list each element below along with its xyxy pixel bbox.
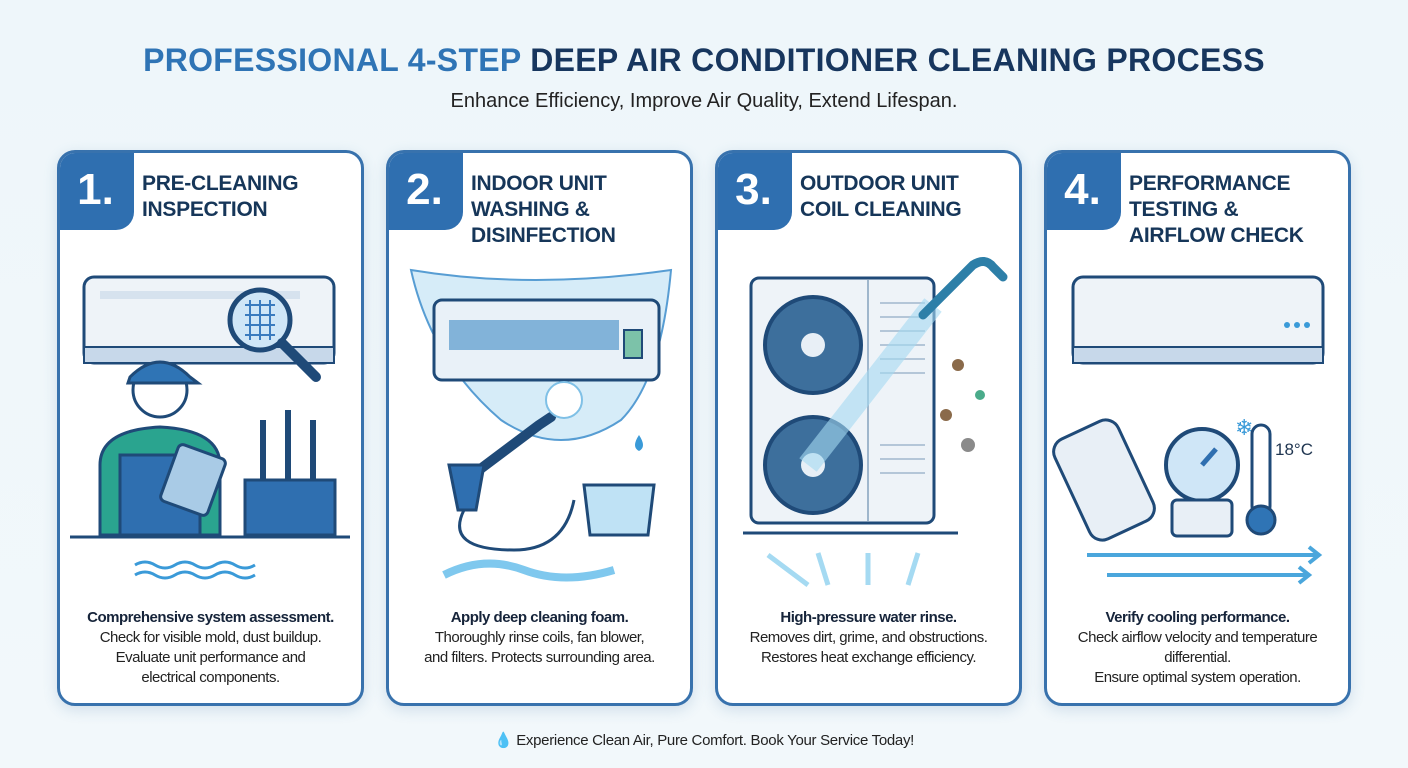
heading 3: COIL CLEANING xyxy=(800,198,961,221)
description 1: Comprehensive system assessment. xyxy=(87,609,334,626)
illustration: inspection xyxy=(70,276,350,580)
description 3: High-pressure water rinse. xyxy=(780,609,957,626)
badge 4 xyxy=(1044,150,1121,230)
badge 2 xyxy=(386,150,463,230)
description 1: electrical components. xyxy=(141,669,280,686)
description 2: and filters. Protects surrounding area. xyxy=(424,649,655,666)
illustration: testing: 18°C xyxy=(1275,440,1313,459)
heading 1 xyxy=(142,172,298,221)
badge 1 xyxy=(57,150,134,230)
description 4: Verify cooling performance. xyxy=(1105,609,1290,626)
illustration: indoor wash xyxy=(410,268,672,582)
description 2: Thoroughly rinse coils, fan blower, xyxy=(435,629,644,646)
heading 2: WASHING & xyxy=(471,198,590,221)
description 2: Apply deep cleaning foam. xyxy=(451,609,628,626)
description 3: Restores heat exchange efficiency. xyxy=(761,649,976,666)
heading 4 xyxy=(1129,172,1304,247)
description 1: Check for visible mold, dust buildup. xyxy=(100,629,321,646)
badge 2: 2. xyxy=(406,165,443,214)
heading 1: INSPECTION xyxy=(142,198,267,221)
description 1 xyxy=(87,609,334,686)
description 2 xyxy=(424,609,655,666)
heading 2: DISINFECTION xyxy=(471,224,616,247)
description 4: Ensure optimal system operation. xyxy=(1094,669,1301,686)
badge 3: 3. xyxy=(735,165,772,214)
illustration: testing xyxy=(1052,276,1324,584)
badge 3 xyxy=(715,150,792,230)
description 4: differential. xyxy=(1164,649,1231,666)
heading 4: TESTING & xyxy=(1129,198,1238,221)
heading 4: PERFORMANCE xyxy=(1129,172,1290,195)
illustration: testing: ❄ xyxy=(1235,415,1253,440)
description 4: Check airflow velocity and temperature xyxy=(1078,629,1317,646)
heading 3: OUTDOOR UNIT xyxy=(800,172,959,195)
illustration: outdoor unit xyxy=(743,257,1008,587)
badge 4: 4. xyxy=(1064,165,1101,214)
panel: step 2 xyxy=(386,150,693,706)
title: PROFESSIONAL 4-STEP DEEP AIR CONDITIONER CLEANING PROCESS xyxy=(143,42,1265,78)
description 1: Evaluate unit performance and xyxy=(116,649,305,666)
description 4 xyxy=(1078,609,1318,686)
subtitle: Enhance Efficiency, Improve Air Quality, Extend Lifespan. xyxy=(451,90,957,112)
footer: 💧 Experience Clean Air, Pure Comfort. Book Your Service Today! xyxy=(494,732,914,749)
heading 3 xyxy=(800,172,961,221)
heading 2: INDOOR UNIT xyxy=(471,172,607,195)
badge 1: 1. xyxy=(77,165,114,214)
description 3 xyxy=(750,609,987,666)
heading 1: PRE-CLEANING xyxy=(142,172,298,195)
heading 4: AIRFLOW CHECK xyxy=(1129,224,1304,247)
description 3: Removes dirt, grime, and obstructions. xyxy=(750,629,987,646)
panel: step 1 xyxy=(57,150,364,706)
heading 2 xyxy=(471,172,616,247)
panel: step 4 xyxy=(1044,150,1351,706)
panel: step 3 xyxy=(715,150,1022,706)
